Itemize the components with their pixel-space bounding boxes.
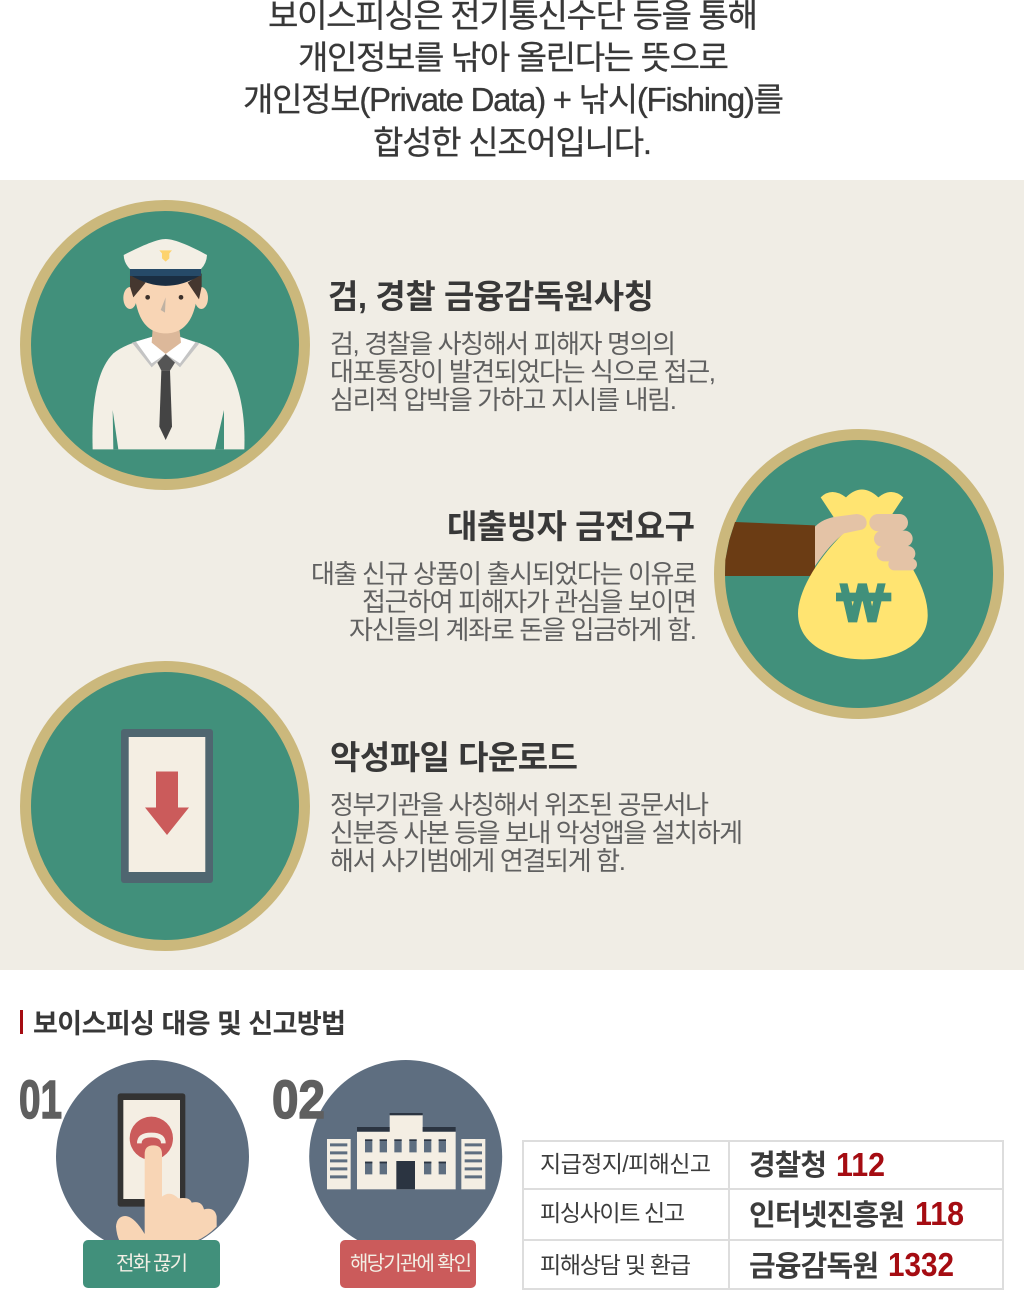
title: 합성한 신조어입니다. xyxy=(373,124,652,161)
button: confirm: 해당기관에 확인 xyxy=(350,1252,472,1275)
text: malicious file description: 신분증 사본 등을 보내 악성앱을 설치하게 xyxy=(330,818,743,848)
text: loan pretext description: 접근하여 피해자가 관심을 보이면 xyxy=(362,587,697,617)
step 02: confirm with institution xyxy=(272,1060,502,1288)
table: reporting contacts xyxy=(523,1141,1003,1289)
text: loan pretext description xyxy=(311,559,697,645)
row: FSS 1332: 1332 xyxy=(888,1246,954,1283)
row: police 112: 112 xyxy=(836,1146,885,1183)
text: malicious file description: 정부기관을 사칭해서 위조된 공문서나 xyxy=(330,790,709,820)
text: prosecutors and police description xyxy=(330,329,716,415)
row: police 112: 지급정지/피해신고 xyxy=(540,1151,711,1177)
text: malicious file description: 해서 사기범에게 연결되게 함. xyxy=(330,846,626,876)
row: KISA 118 xyxy=(540,1195,964,1232)
row: FSS 1332 xyxy=(540,1246,954,1283)
title xyxy=(243,0,784,161)
row: KISA 118: 118 xyxy=(915,1195,964,1232)
heading: malicious file download: 악성파일 다운로드 xyxy=(330,739,578,776)
section heading: response and reporting: 보이스피싱 대응 및 신고방법 xyxy=(33,1009,346,1039)
text: loan pretext description: 대출 신규 상품이 출시되었다는 이유로 xyxy=(311,559,697,589)
panel: voice phishing methods xyxy=(0,180,1024,970)
number 01: 01 xyxy=(19,1070,62,1130)
row: KISA 118: 피싱사이트 신고 xyxy=(540,1200,685,1226)
text: prosecutors and police description: 검, 경찰을 사칭해서 피해자 명의의 xyxy=(330,329,676,359)
text: loan pretext description: 자신들의 계좌로 돈을 입금하게 함. xyxy=(349,615,697,645)
icon: money bag xyxy=(720,434,998,714)
text: prosecutors and police description: 대포통장이 발견되었다는 식으로 접근, xyxy=(330,357,716,387)
text: malicious file description xyxy=(330,790,743,876)
row: FSS 1332: 피해상담 및 환급 xyxy=(540,1252,691,1278)
row: police 112 xyxy=(540,1146,885,1183)
row: police 112: 경찰청 xyxy=(749,1149,827,1182)
row: KISA 118: 인터넷진흥원 xyxy=(749,1199,905,1232)
icon: download on phone xyxy=(26,666,304,946)
title: 개인정보(Private Data) + 낚시(Fishing)를 xyxy=(243,81,784,118)
button: hang up: 전화 끊기 xyxy=(116,1252,188,1275)
icon: police officer xyxy=(26,206,304,484)
heading: prosecutors and police impersonation: 검, 경찰 금융감독원사칭 xyxy=(328,278,654,315)
text: prosecutors and police description: 심리적 압박을 가하고 지시를 내림. xyxy=(330,385,677,415)
row: FSS 1332: 금융감독원 xyxy=(749,1250,879,1283)
number 02: 02 xyxy=(272,1070,325,1130)
heading: loan pretext: 대출빙자 금전요구 xyxy=(447,508,695,545)
button: confirm xyxy=(340,1240,476,1288)
step 01: hang up xyxy=(19,1060,249,1288)
title: 개인정보를 낚아 올린다는 뜻으로 xyxy=(298,39,729,76)
button: hang up xyxy=(83,1240,220,1288)
